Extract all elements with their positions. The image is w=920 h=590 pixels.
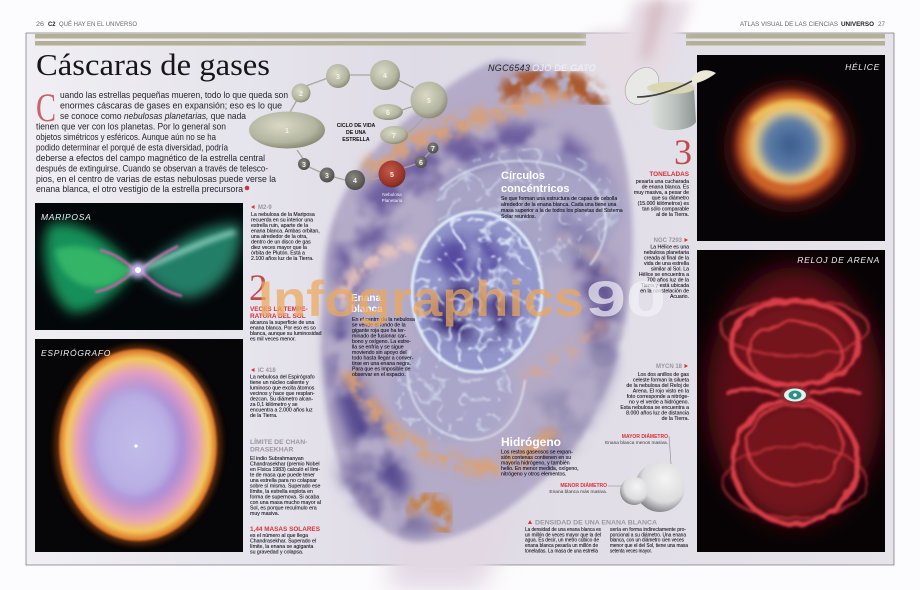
stage 3 lower: [320, 168, 334, 182]
density of a white dwarf text: toneladas. La masa de una estrella: [525, 548, 598, 554]
Chandrasekhar limit text: con una masa mucho mayor al: [250, 500, 321, 506]
Enana blanca text: moviendo sin apoyo del: [352, 350, 407, 356]
fact: 3 toneladas: tan sólo comparable: [642, 206, 689, 212]
drop cap: C: [36, 85, 56, 130]
larger sphere: [635, 462, 685, 512]
fact: 3 toneladas: que su diámetro: [652, 196, 689, 202]
MyCn 18 text: de la Tierra.: [662, 416, 689, 422]
stage 2: [292, 84, 310, 102]
MyCn 18 text: no y el verde a hidrógeno.: [629, 400, 689, 406]
NGC 7293 text: creada al final de la: [644, 256, 689, 262]
Chandrasekhar limit text: forma de supernova. Si acaba: [250, 494, 319, 500]
fact: 3 toneladas: al de la Tierra.: [656, 212, 689, 218]
M2-9 text: una alrededor de la otra,: [251, 234, 308, 240]
spoon: [637, 81, 692, 97]
M2-9 text: enana blanca. Ambas orbitan,: [251, 228, 320, 234]
M2-9 text: estrella ruin, aparte de la: [251, 223, 308, 229]
connectors: [290, 75, 430, 180]
stage 1: [249, 112, 325, 148]
fact: 3 toneladas: muy masiva, a pesar de: [634, 190, 689, 196]
diagram caption: CICLO DE VIDA: [337, 123, 376, 129]
density of a white dwarf text: La densidad de una enana blanca es: [525, 527, 601, 533]
IC 418 text: [250, 368, 315, 419]
density of a white dwarf text: [525, 520, 688, 554]
MyCn 18 text: [620, 364, 689, 422]
Enana blanca text: Para que es imposible de: [352, 366, 411, 372]
density of a white dwarf text: sería en forma indirectamente pro-: [610, 527, 686, 533]
Hidrógeno text: Los restos gaseosos se expan-: [501, 450, 573, 456]
cup contents: [647, 82, 695, 94]
planetary nebula label: Nebulosa: [382, 192, 402, 197]
hourglass eye: [780, 386, 810, 404]
stage 4 lower: [345, 170, 365, 190]
stage numbers: 3: [325, 173, 329, 180]
Chandrasekhar limit text: Chandrasekhar (premio Nobel: [250, 462, 320, 468]
illustration: spoon and cup of white dwarf matter: [618, 61, 716, 130]
stage numbers: 2: [299, 91, 303, 98]
spirograph nebula: [54, 345, 222, 545]
running head right: [740, 21, 885, 28]
Hidrógeno text: Hidrógeno: [501, 435, 561, 449]
stage numbers: 7: [392, 133, 396, 140]
intro text block: pios, en el centro de varias de estas nebulosas puede verse la: [36, 173, 277, 184]
Chandrasekhar limit text: LÍMITE DE CHAN-: [250, 437, 307, 446]
NGC 7293 text: Tierra y está ubicada: [641, 283, 689, 289]
nebula inner bubbles: [433, 146, 623, 270]
stage numbers: 4: [383, 73, 387, 80]
white dwarf diameter comparison: Enana blanca más masiva.: [549, 489, 607, 495]
Chandrasekhar limit text: DRASEKHAR: [250, 446, 294, 454]
spoon heap: [691, 70, 716, 84]
fact: 1,44 masas solares: límite, la enana se agiganta: [250, 544, 314, 550]
fact: 2 veces la temperatura: enana blanca. Por eso es so: [250, 326, 316, 332]
Chandrasekhar limit text: una estrella para no colapsar: [250, 478, 317, 484]
fact: 1,44 masas solares: 1,44 MASAS SOLARES: [250, 526, 321, 533]
cup lid: [618, 61, 666, 111]
MyCn 18 text: celeste forman la silueta: [633, 378, 689, 384]
NGC 7293 text: La Hélice es una: [650, 244, 689, 250]
Enana blanca text: minado de fusionar car-: [352, 334, 407, 340]
white dwarf diameter comparison: [549, 433, 685, 512]
fact: 2 veces la temperatura: VECES LA TEMPE-: [250, 306, 308, 313]
M2-9 text: M2-9: [258, 205, 272, 211]
Hidrógeno text: nitrógeno y otros elementos.: [501, 472, 566, 478]
fact: 1,44 masas solares: es el número al que llega: [250, 533, 308, 539]
central nebula image NGC 6543: [321, 0, 692, 590]
M2-9 text: diez veces mayor que la: [251, 245, 307, 251]
intro text block: enana blanca, el otro vestigio de la estrella precursora: [36, 183, 244, 194]
density of a white dwarf text: porcional a su diámetro. Una enana: [610, 532, 686, 538]
stage numbers: 5: [427, 98, 431, 105]
running head right: 27: [878, 21, 885, 28]
density of a white dwarf text: blanca, con un diámetro cien veces: [610, 538, 684, 544]
stage numbers: 3: [336, 74, 340, 81]
Enana blanca text: bono y oxígeno. La estre-: [352, 339, 411, 345]
fact: 2 veces la temperatura: RATURA DEL SOL: [250, 313, 306, 320]
density of a white dwarf text: setenta veces mayor.: [610, 548, 652, 554]
density of a white dwarf text: DENSIDAD DE UNA ENANA BLANCA: [535, 520, 657, 526]
Círculos concéntricos text: Círculos: [501, 170, 545, 182]
NGC 7293 text: nebulosa planetaria: [644, 250, 689, 256]
larger diameter label: MAYOR DIÁMETRO: [622, 433, 668, 440]
running head left: QUÉ HAY EN EL UNIVERSO: [59, 19, 137, 28]
stage numbers: [285, 73, 435, 185]
Círculos concéntricos text: masa superior a la de todos los planetas del Sistema: [501, 208, 623, 214]
Chandrasekhar limit text: límite, la estrella explota en: [250, 489, 313, 495]
Círculos concéntricos text: alrededor de la enana blanca. Cada una tiene una: [501, 202, 616, 208]
IC 418 text: encuentra a 2.000 años luz: [250, 408, 313, 414]
Chandrasekhar limit text: El indio Subrahmanyan: [250, 456, 304, 462]
MyCn 18 text: Arena. El rojo visto en la: [633, 388, 689, 394]
Círculos concéntricos text: Se que forman una estructura de capas de cebolla: [501, 196, 617, 202]
Chandrasekhar limit text: muy masiva.: [250, 511, 279, 517]
butterfly nebula lobes: [44, 223, 135, 312]
label: ESPIRÓGRAFO: [41, 348, 111, 358]
intro text block: [36, 85, 288, 194]
MyCn 18 text: MYCN 18: [656, 364, 683, 370]
Hidrógeno text: helio. En menor medida, oxígeno,: [501, 466, 579, 472]
stage 5 red: planetary nebula: [378, 160, 406, 188]
IC 418 text: La nebulosa del Espirógrafo: [250, 374, 315, 380]
intro text block: se conoce como nebulosas planetarias, que nada: [60, 110, 247, 121]
M2-9 text: 2.100 años luz de la Tierra.: [251, 256, 314, 262]
label: MARIPOSA: [41, 212, 91, 222]
density of a white dwarf text: menor que el del Sol, tiene una masa: [610, 543, 688, 549]
Enana blanca text: observar en el espacio.: [352, 372, 406, 378]
Círculos concéntricos text: [501, 170, 623, 220]
photo: Mariposa: [35, 203, 243, 330]
Chandrasekhar limit text: Sol, es porque recuímulo era: [250, 506, 317, 512]
white dwarf diameter comparison: Enana blanca menos masiva.: [605, 440, 668, 446]
IC 418 text: luminoso que excita átomos: [250, 386, 315, 392]
leader lines: [608, 436, 671, 486]
Chandrasekhar limit text: en Física 1983) calculó el lími-: [250, 467, 320, 473]
stage 3 upper: [326, 64, 350, 88]
NGC 7293 text: NGC 7293: [654, 238, 683, 244]
IC 418 text: IC 418: [258, 368, 276, 374]
watermark: 90: [586, 271, 666, 327]
stage numbers: 6: [386, 110, 390, 117]
intro text block: objetos simétricos y esféricos. Aunque aún no se ha: [36, 131, 217, 142]
photo: Reloj de arena: [697, 250, 885, 552]
intro text block: deberse a efectos del campo magnético de la estrella central: [36, 152, 265, 163]
nebula luminous filaments: [392, 148, 620, 440]
fact: 3 toneladas: pesaría una cucharada: [636, 179, 689, 185]
NGC 7293 text: similar al Sol. La: [651, 266, 689, 272]
MyCn 18 text: 8.000 años luz de distancia: [626, 410, 689, 416]
NGC 7293 text: [639, 238, 689, 300]
stage 6 lower: [415, 156, 427, 168]
stage 3 small: [298, 158, 310, 170]
fact: 2 veces la temperatura: es mil veces menor.: [250, 336, 296, 342]
stage 4 upper: [370, 60, 400, 90]
NGC 7293 text: en la constelación de: [640, 288, 689, 294]
intro text block: enormes cáscaras de gases en expansión; eso es lo que: [60, 100, 282, 110]
IC 418 text: vecinos y hace que resplan-: [250, 391, 315, 397]
fact: 2 veces la temperatura: alcanza la superficie de una: [250, 320, 314, 326]
MyCn 18 text: Los dos anillos de gas: [638, 372, 689, 378]
running head left: 26: [36, 21, 45, 28]
fact: 2 veces la temperatura: blanca, aunque su luminosidad: [250, 331, 322, 337]
photo: Espirógrafo: [35, 339, 243, 552]
stage 5 upper: [410, 82, 448, 118]
NGC 7293 text: Hélice se encuentra a: [639, 272, 689, 278]
intro text block: podido determinar el porqué de esta diversidad, podría: [36, 142, 229, 152]
nebula lower glow: [390, 510, 520, 590]
running head right: ATLAS VISUAL DE LAS CIENCIAS: [740, 21, 838, 28]
M2-9 text: La nebulosa de la Mariposa: [251, 212, 315, 218]
density of a white dwarf text: agua. Es decir, un metro cúbico de: [525, 538, 599, 544]
NGC 7293 text: vida de una estrella: [644, 261, 689, 267]
nebula outer envelope: [321, 60, 633, 542]
Enana blanca text: se vende el fondo de la: [352, 322, 406, 328]
stage numbers: 6: [419, 160, 423, 167]
stage numbers: 3: [302, 162, 306, 169]
density of a white dwarf text: un millón de veces mayor que la del: [525, 532, 601, 538]
running head left: [36, 19, 137, 28]
fact: 3 toneladas: [634, 132, 692, 218]
M2-9 text: [251, 205, 320, 262]
Enana blanca text: lla se enfría y se sigue: [352, 344, 404, 350]
Círculos concéntricos text: concéntricos: [501, 183, 569, 195]
title: Cáscaras de gases: [36, 47, 270, 82]
diagram caption: DE UNA: [346, 130, 366, 136]
stage 7 upper: [380, 126, 408, 144]
nebula plume top: [586, 0, 692, 110]
density of a white dwarf text: enana blanca pesaría un millón de: [525, 543, 598, 549]
MyCn 18 text: foto corresponde a nitróge-: [627, 394, 689, 400]
fact: 3 toneladas: TONELADAS: [649, 171, 690, 178]
smaller diameter label: MENOR DIÁMETRO: [560, 482, 607, 489]
running head right: UNIVERSO: [841, 21, 874, 28]
running head left: C2: [48, 21, 56, 28]
Enana blanca text: [351, 293, 415, 378]
fact: 1,44 masas solares: [250, 526, 321, 556]
diagram caption: [337, 123, 376, 143]
M2-9 text: recuerda en su interior una: [251, 218, 313, 224]
NGC 7293 text: 700 años luz de la: [647, 278, 689, 284]
life cycle diagram: [249, 60, 448, 203]
Hidrógeno text: sión contenas contienen en su: [501, 455, 571, 461]
hourglass rings: [721, 300, 869, 524]
decorative header bars: [35, 34, 885, 46]
watermark: Infographics: [258, 271, 584, 327]
stage numbers: 7: [431, 146, 435, 153]
Enana blanca text: Enana: [351, 293, 381, 304]
smaller sphere: [620, 477, 648, 505]
cup body: [648, 88, 696, 130]
fact: 2 veces la temperatura: 2: [249, 268, 268, 309]
intro text block: después de extinguirse. Cuando se observan a través de telesco-: [36, 162, 268, 174]
M2-9 text: órbita de Plutón. Está a: [251, 250, 305, 256]
Hidrógeno text: [501, 435, 579, 478]
fact: 3 toneladas: (15.000 kilómetros) es: [638, 201, 689, 207]
nebula orange shells: [338, 76, 602, 527]
Enana blanca text: tirse en una enana negra.: [352, 361, 411, 367]
hourglass glow: [707, 267, 883, 523]
stage numbers: 1: [285, 128, 289, 135]
IC 418 text: dezcan. Su diámetro alcan-: [250, 396, 313, 402]
M2-9 text: dentro de un disco de gas: [251, 240, 311, 246]
Chandrasekhar limit text: te de masa que puede tener: [250, 472, 315, 478]
label: RELOJ DE ARENA: [797, 255, 880, 265]
Enana blanca text: gigante roja que ha ter-: [352, 328, 406, 334]
Círculos concéntricos text: Solar reunidos.: [501, 214, 536, 220]
Enana blanca text: todo hasta llegar a conver-: [352, 356, 414, 362]
Chandrasekhar limit text: [250, 437, 321, 517]
intro text block: tienen que ver con los planetas. Por lo general son: [36, 120, 226, 132]
IC 418 text: de la Tierra.: [250, 413, 277, 419]
fact: 3 toneladas: 3: [674, 132, 692, 172]
stage 7 lower: [428, 142, 438, 154]
fact: 3 toneladas: de enana blanca. Es: [642, 184, 689, 190]
Enana blanca text: En el centro de la nebulosa: [352, 317, 415, 323]
photo: Hélice: [697, 55, 885, 241]
stage numbers: 4: [353, 178, 357, 185]
fact: 1,44 masas solares: Chandrasekhar. Superado el: [250, 538, 316, 544]
planetary nebula label: [382, 192, 403, 203]
Hidrógeno text: mayoría hidrógeno, y también: [501, 460, 570, 466]
helix nebula: [724, 80, 856, 212]
Enana blanca text: blanca: [351, 304, 383, 315]
MyCn 18 text: de la nebulosa del Reloj de: [626, 383, 689, 389]
NGC 7293 text: Acuario.: [670, 294, 689, 300]
stage numbers: 5: [390, 172, 394, 179]
diagram caption: ESTRELLA: [342, 137, 370, 143]
fact: 2 veces la temperatura: [249, 268, 322, 342]
planetary nebula label: Planetaria: [382, 198, 403, 203]
fact: 1,44 masas solares: su gravedad y colapsa.: [250, 550, 303, 556]
IC 418 text: za 0,1 kilómetro y se: [250, 402, 298, 408]
MyCn 18 text: Esta nebulosa se encuentra a: [620, 405, 689, 411]
Chandrasekhar limit text: sobre sí misma. Superado ese: [250, 484, 320, 490]
nebula image title: NGC6543OJO DE GATO: [488, 63, 596, 73]
intro text block: uando las estrellas pequeñas mueren, todo lo que queda son: [60, 89, 288, 100]
IC 418 text: tiene un núcleo caliente y: [250, 380, 309, 386]
label: HÉLICE: [845, 62, 880, 72]
stage 6 upper: [373, 104, 403, 120]
nebula purple bands: [332, 123, 615, 320]
